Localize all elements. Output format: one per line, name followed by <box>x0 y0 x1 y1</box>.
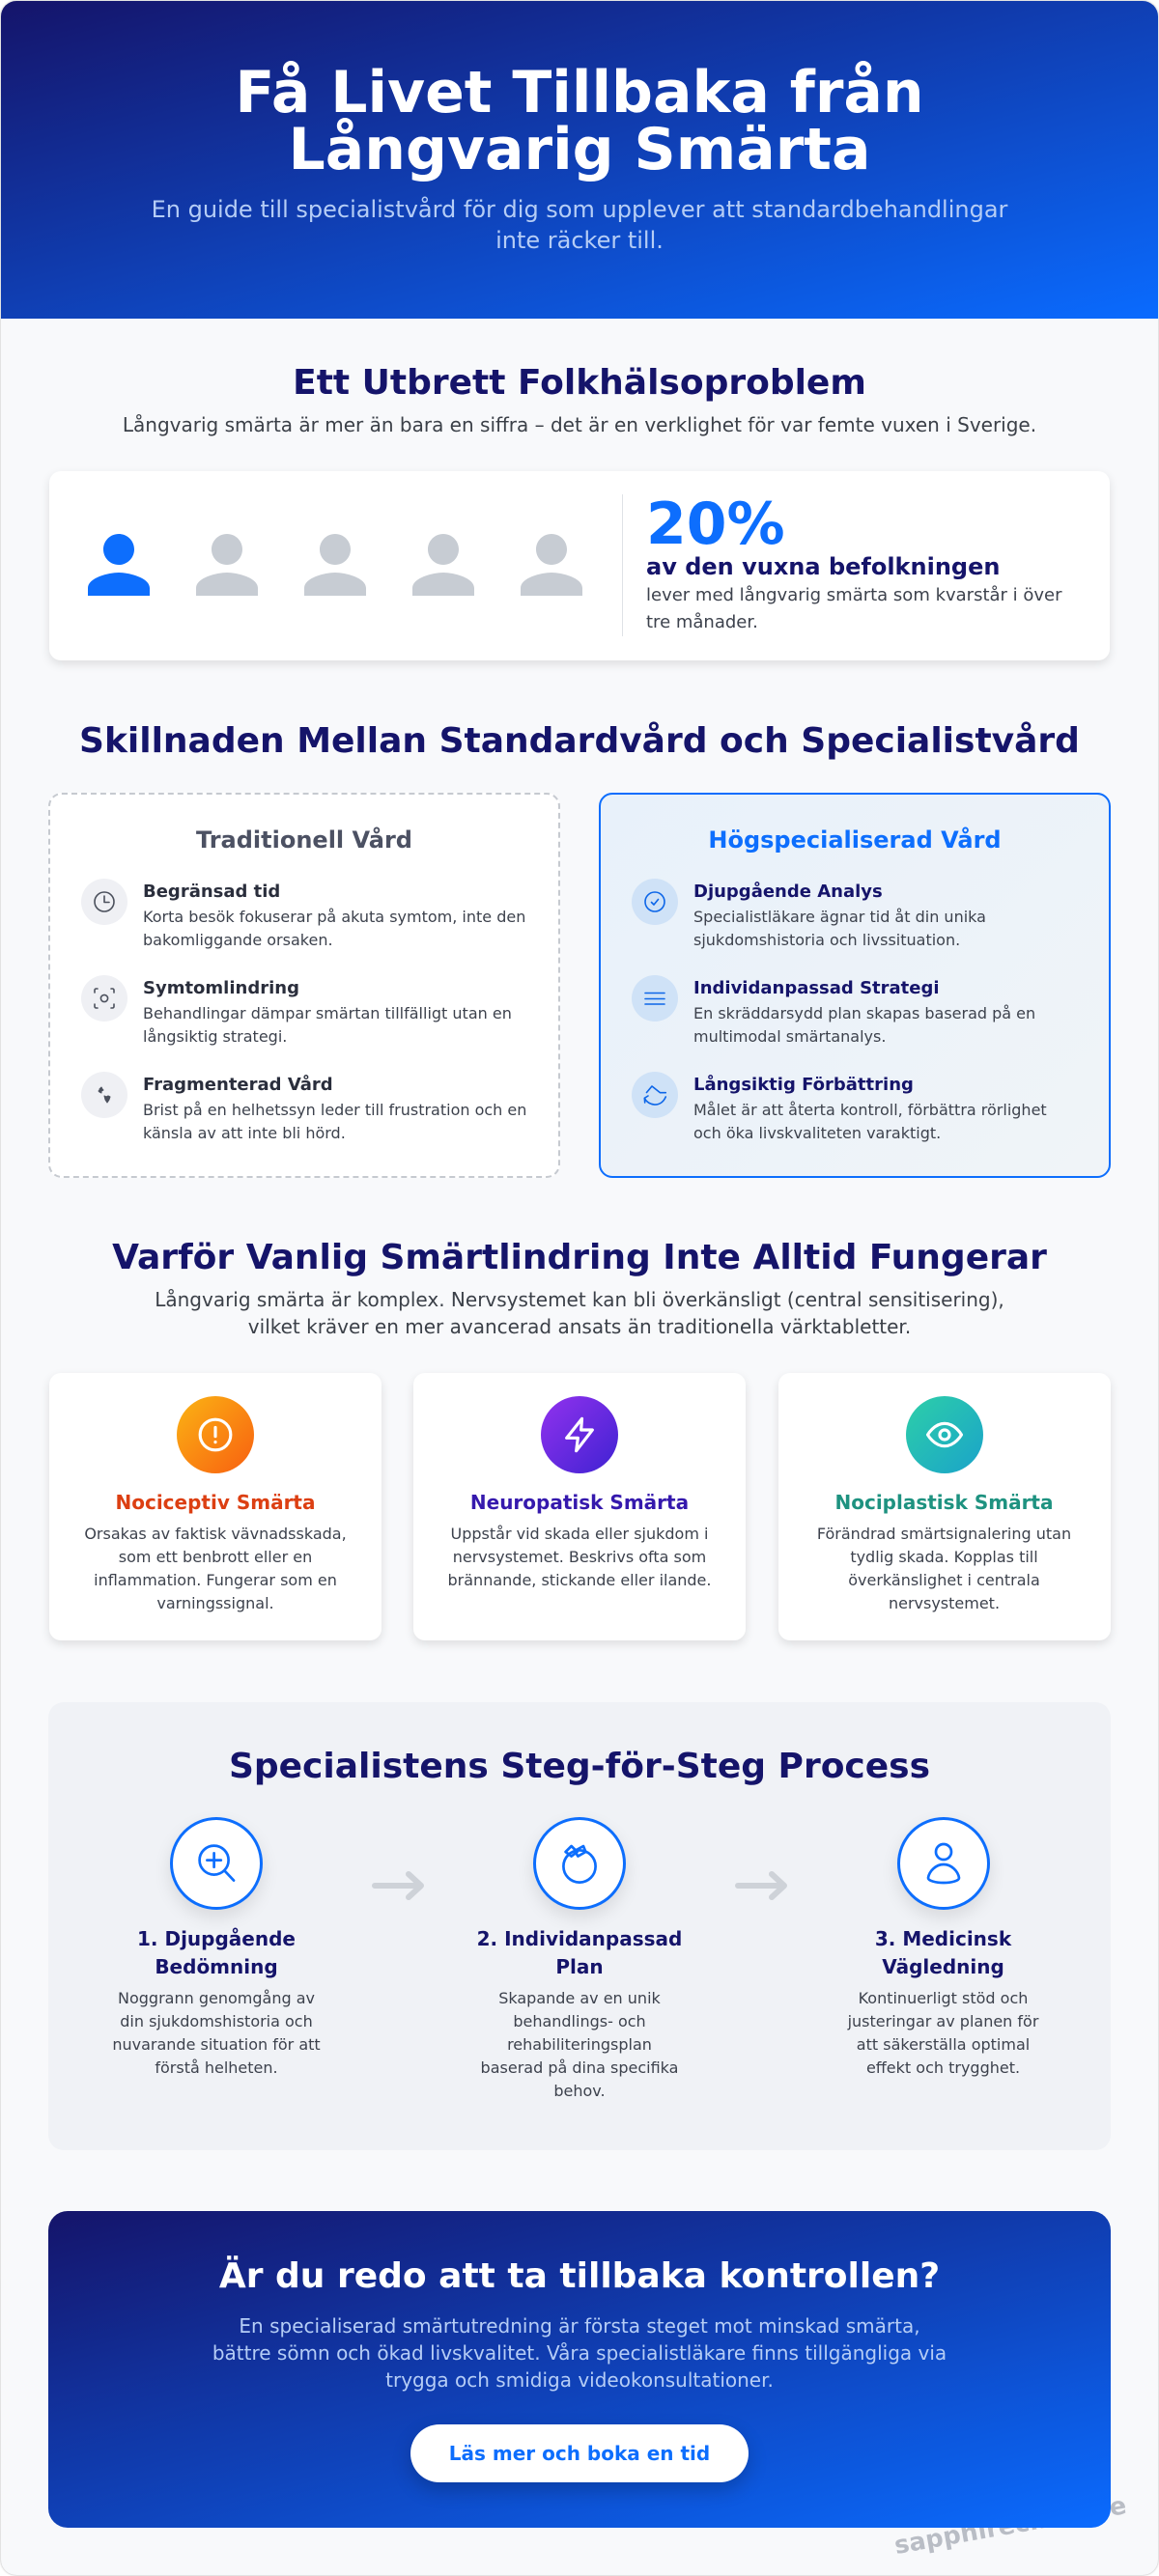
item description <box>693 1101 1047 1142</box>
item title: Fragmenterad Vård <box>143 1075 333 1095</box>
CTA heading: Är du redo att ta tillbaka kontrollen? <box>219 2256 940 2296</box>
process heading: Specialistens Steg-för-Steg Process <box>229 1747 930 1786</box>
button: Läs mer och boka en tid <box>449 2442 710 2465</box>
step title: Vägledning <box>882 1954 1004 1977</box>
subtitle: En guide till specialistvård för dig som upplever att standardbehandlingar <box>152 196 1007 223</box>
item description: känsla av att inte bli hörd. <box>143 1124 346 1142</box>
step description: att säkerställa optimal <box>857 2035 1030 2054</box>
step description <box>112 1989 321 2077</box>
item description: Målet är att återta kontroll, förbättra rörlighet <box>693 1101 1047 1119</box>
icon: lines <box>632 975 678 1022</box>
icon: person <box>412 534 474 596</box>
arrow <box>735 1871 787 1900</box>
item description: Brist på en helhetssyn leder till frustration och en <box>143 1101 526 1119</box>
icon: highlighted person <box>88 534 150 596</box>
panel: call to action <box>48 2211 1111 2528</box>
item: long-term improvement <box>632 1072 1047 1142</box>
step description: nuvarande situation för att <box>112 2035 321 2054</box>
card title: Nociceptiv Smärta <box>115 1491 315 1514</box>
subtitle: inte räcker till. <box>495 226 664 253</box>
heading: public health problem: Ett Utbrett Folkhälsoproblem <box>293 363 866 403</box>
statistic: 20%: 20% <box>646 490 785 558</box>
icon: bolt <box>541 1396 618 1473</box>
item: deep analysis <box>632 879 986 949</box>
title: Få Livet Tillbaka från <box>235 59 924 126</box>
step 2 <box>477 1817 682 2100</box>
panel: process <box>48 1702 1111 2150</box>
item description: Korta besök fokuserar på akuta symtom, inte den <box>143 908 525 926</box>
title: Långvarig Smärta <box>289 116 870 183</box>
card description: nervsystemet. Beskrivs ofta som <box>453 1548 706 1566</box>
icon: person <box>196 534 258 596</box>
card title: Nociplastisk Smärta <box>834 1491 1053 1514</box>
step description: justeringar av planen för <box>848 2012 1038 2030</box>
panel: specialised care <box>599 793 1111 1178</box>
item title: Djupgående Analys <box>693 882 883 902</box>
card description: brännande, stickande eller ilande. <box>448 1571 711 1589</box>
item description <box>693 1004 1035 1046</box>
step title <box>477 1927 682 1977</box>
item description: multimodal smärtanalys. <box>693 1027 886 1046</box>
subtitle <box>152 196 1008 253</box>
card description: överkänslighet i centrala <box>848 1571 1040 1589</box>
item title: Individanpassad Strategi <box>693 978 940 998</box>
arrow <box>372 1871 424 1900</box>
intro text: vilket kräver en mer avancerad ansats än traditionella värktabletter. <box>248 1315 911 1338</box>
item description: bakomliggande orsaken. <box>143 931 333 949</box>
step description: Kontinuerligt stöd och <box>859 1989 1028 2007</box>
step description: effekt och trygghet. <box>866 2058 1020 2077</box>
step 3 <box>847 1817 1039 2077</box>
card: nociceptive <box>49 1373 382 1640</box>
statistic description <box>646 585 1062 632</box>
item description: sjukdomshistoria och livssituation. <box>693 931 960 949</box>
step description <box>847 1989 1039 2077</box>
step description: Noggrann genomgång av <box>118 1989 315 2007</box>
card description <box>817 1525 1071 1612</box>
card: nociplastic <box>778 1373 1111 1640</box>
item description: långsiktig strategi. <box>143 1027 287 1046</box>
icon: plan <box>533 1817 626 1910</box>
panel: traditional care <box>48 793 560 1178</box>
item description <box>143 1101 526 1142</box>
icon: magnifier <box>170 1817 263 1910</box>
watermark: sapphireclinic.se <box>892 2491 1129 2561</box>
intro text <box>155 1288 1004 1338</box>
card description: tydlig skada. Kopplas till <box>850 1548 1038 1566</box>
step description: behandlings- och <box>513 2012 646 2030</box>
CTA text: bättre sömn och ökad livskvalitet. Våra specialistläkare finns tillgängliga via <box>212 2341 947 2365</box>
heading: why pain relief fails: Varför Vanlig Smärtlindring Inte Alltid Fungerar <box>112 1238 1047 1277</box>
CTA text: En specialiserad smärtutredning är första steget mot minskad smärta, <box>239 2314 920 2338</box>
card description: som ett benbrott eller en <box>119 1548 312 1566</box>
card description: inflammation. Fungerar som en <box>94 1571 337 1589</box>
card title: Neuropatisk Smärta <box>470 1491 689 1514</box>
item description <box>693 908 986 949</box>
card description: varningssignal. <box>156 1594 274 1612</box>
CTA text: trygga och smidiga videokonsultationer. <box>385 2368 774 2392</box>
step title: 1. Djupgående <box>137 1927 296 1950</box>
item title: Långsiktig Förbättring <box>693 1075 914 1095</box>
step description: förstå helheten. <box>155 2058 278 2077</box>
panel heading: Högspecialiserad Vård <box>708 826 1002 854</box>
step title: 2. Individanpassad <box>477 1927 682 1950</box>
icon: person <box>521 534 582 596</box>
item description: Specialistläkare ägnar tid åt din unika <box>693 908 986 926</box>
item description <box>143 908 525 949</box>
step title: Bedömning <box>155 1954 278 1977</box>
step title <box>137 1927 296 1977</box>
step description: din sjukdomshistoria och <box>120 2012 313 2030</box>
statistic label: av den vuxna befolkningen <box>646 553 1000 580</box>
header banner <box>1 1 1158 319</box>
icon: person outline <box>896 1817 989 1910</box>
button <box>410 2424 749 2482</box>
item description: En skräddarsydd plan skapas baserad på en <box>693 1004 1035 1022</box>
step 1 <box>112 1817 321 2077</box>
icon: clock <box>81 879 127 925</box>
card description: Uppstår vid skada eller sjukdom i <box>451 1525 708 1543</box>
step description: baserad på dina specifika <box>481 2058 678 2077</box>
icon: cycle <box>632 1072 678 1118</box>
card: neuropathic <box>413 1373 746 1640</box>
item title: Begränsad tid <box>143 882 280 902</box>
item title: Symtomlindring <box>143 978 299 998</box>
card description: Förändrad smärtsignalering utan <box>817 1525 1071 1543</box>
item: limited time <box>81 879 525 949</box>
card description <box>448 1525 711 1589</box>
icon: fragments <box>81 1072 127 1118</box>
statistic description: lever med långvarig smärta som kvarstår i över <box>646 585 1062 605</box>
item: individual strategy <box>632 975 1035 1046</box>
icon: alert <box>177 1396 254 1473</box>
step description <box>481 1989 678 2100</box>
card description <box>84 1525 347 1612</box>
step title: Plan <box>555 1954 604 1977</box>
intro text: Långvarig smärta är mer än bara en siffra – det är en verklighet för var femte vuxen i Sverige. <box>123 413 1036 436</box>
panel heading: Traditionell Vård <box>196 826 412 854</box>
icon row: one in five people <box>88 534 582 596</box>
heading: comparison: Skillnaden Mellan Standardvård och Specialistvård <box>79 721 1080 761</box>
icon: eye <box>906 1396 983 1473</box>
icon: person <box>304 534 366 596</box>
item description: Behandlingar dämpar smärtan tillfälligt utan en <box>143 1004 512 1022</box>
card description: nervsystemet. <box>889 1594 1000 1612</box>
card description: Orsakas av faktisk vävnadsskada, <box>84 1525 347 1543</box>
title <box>235 59 924 183</box>
step title: 3. Medicinsk <box>875 1927 1011 1950</box>
CTA text <box>212 2314 947 2392</box>
step title <box>875 1927 1012 1977</box>
panel: statistic card <box>49 471 1110 660</box>
item description <box>143 1004 512 1046</box>
item: symptom relief <box>81 975 512 1046</box>
intro text: Långvarig smärta är komplex. Nervsystemet kan bli överkänsligt (central sensitisering), <box>155 1288 1004 1311</box>
icon: focus <box>81 975 127 1022</box>
item: fragmented care <box>81 1072 526 1142</box>
step description: behov. <box>553 2082 606 2100</box>
step description: rehabiliteringsplan <box>507 2035 652 2054</box>
statistic description: tre månader. <box>646 612 758 632</box>
pain type cards <box>46 1383 1113 1647</box>
step description: Skapande av en unik <box>498 1989 661 2007</box>
item description: och öka livskvaliteten varaktigt. <box>693 1124 941 1142</box>
icon: check circle <box>632 879 678 925</box>
